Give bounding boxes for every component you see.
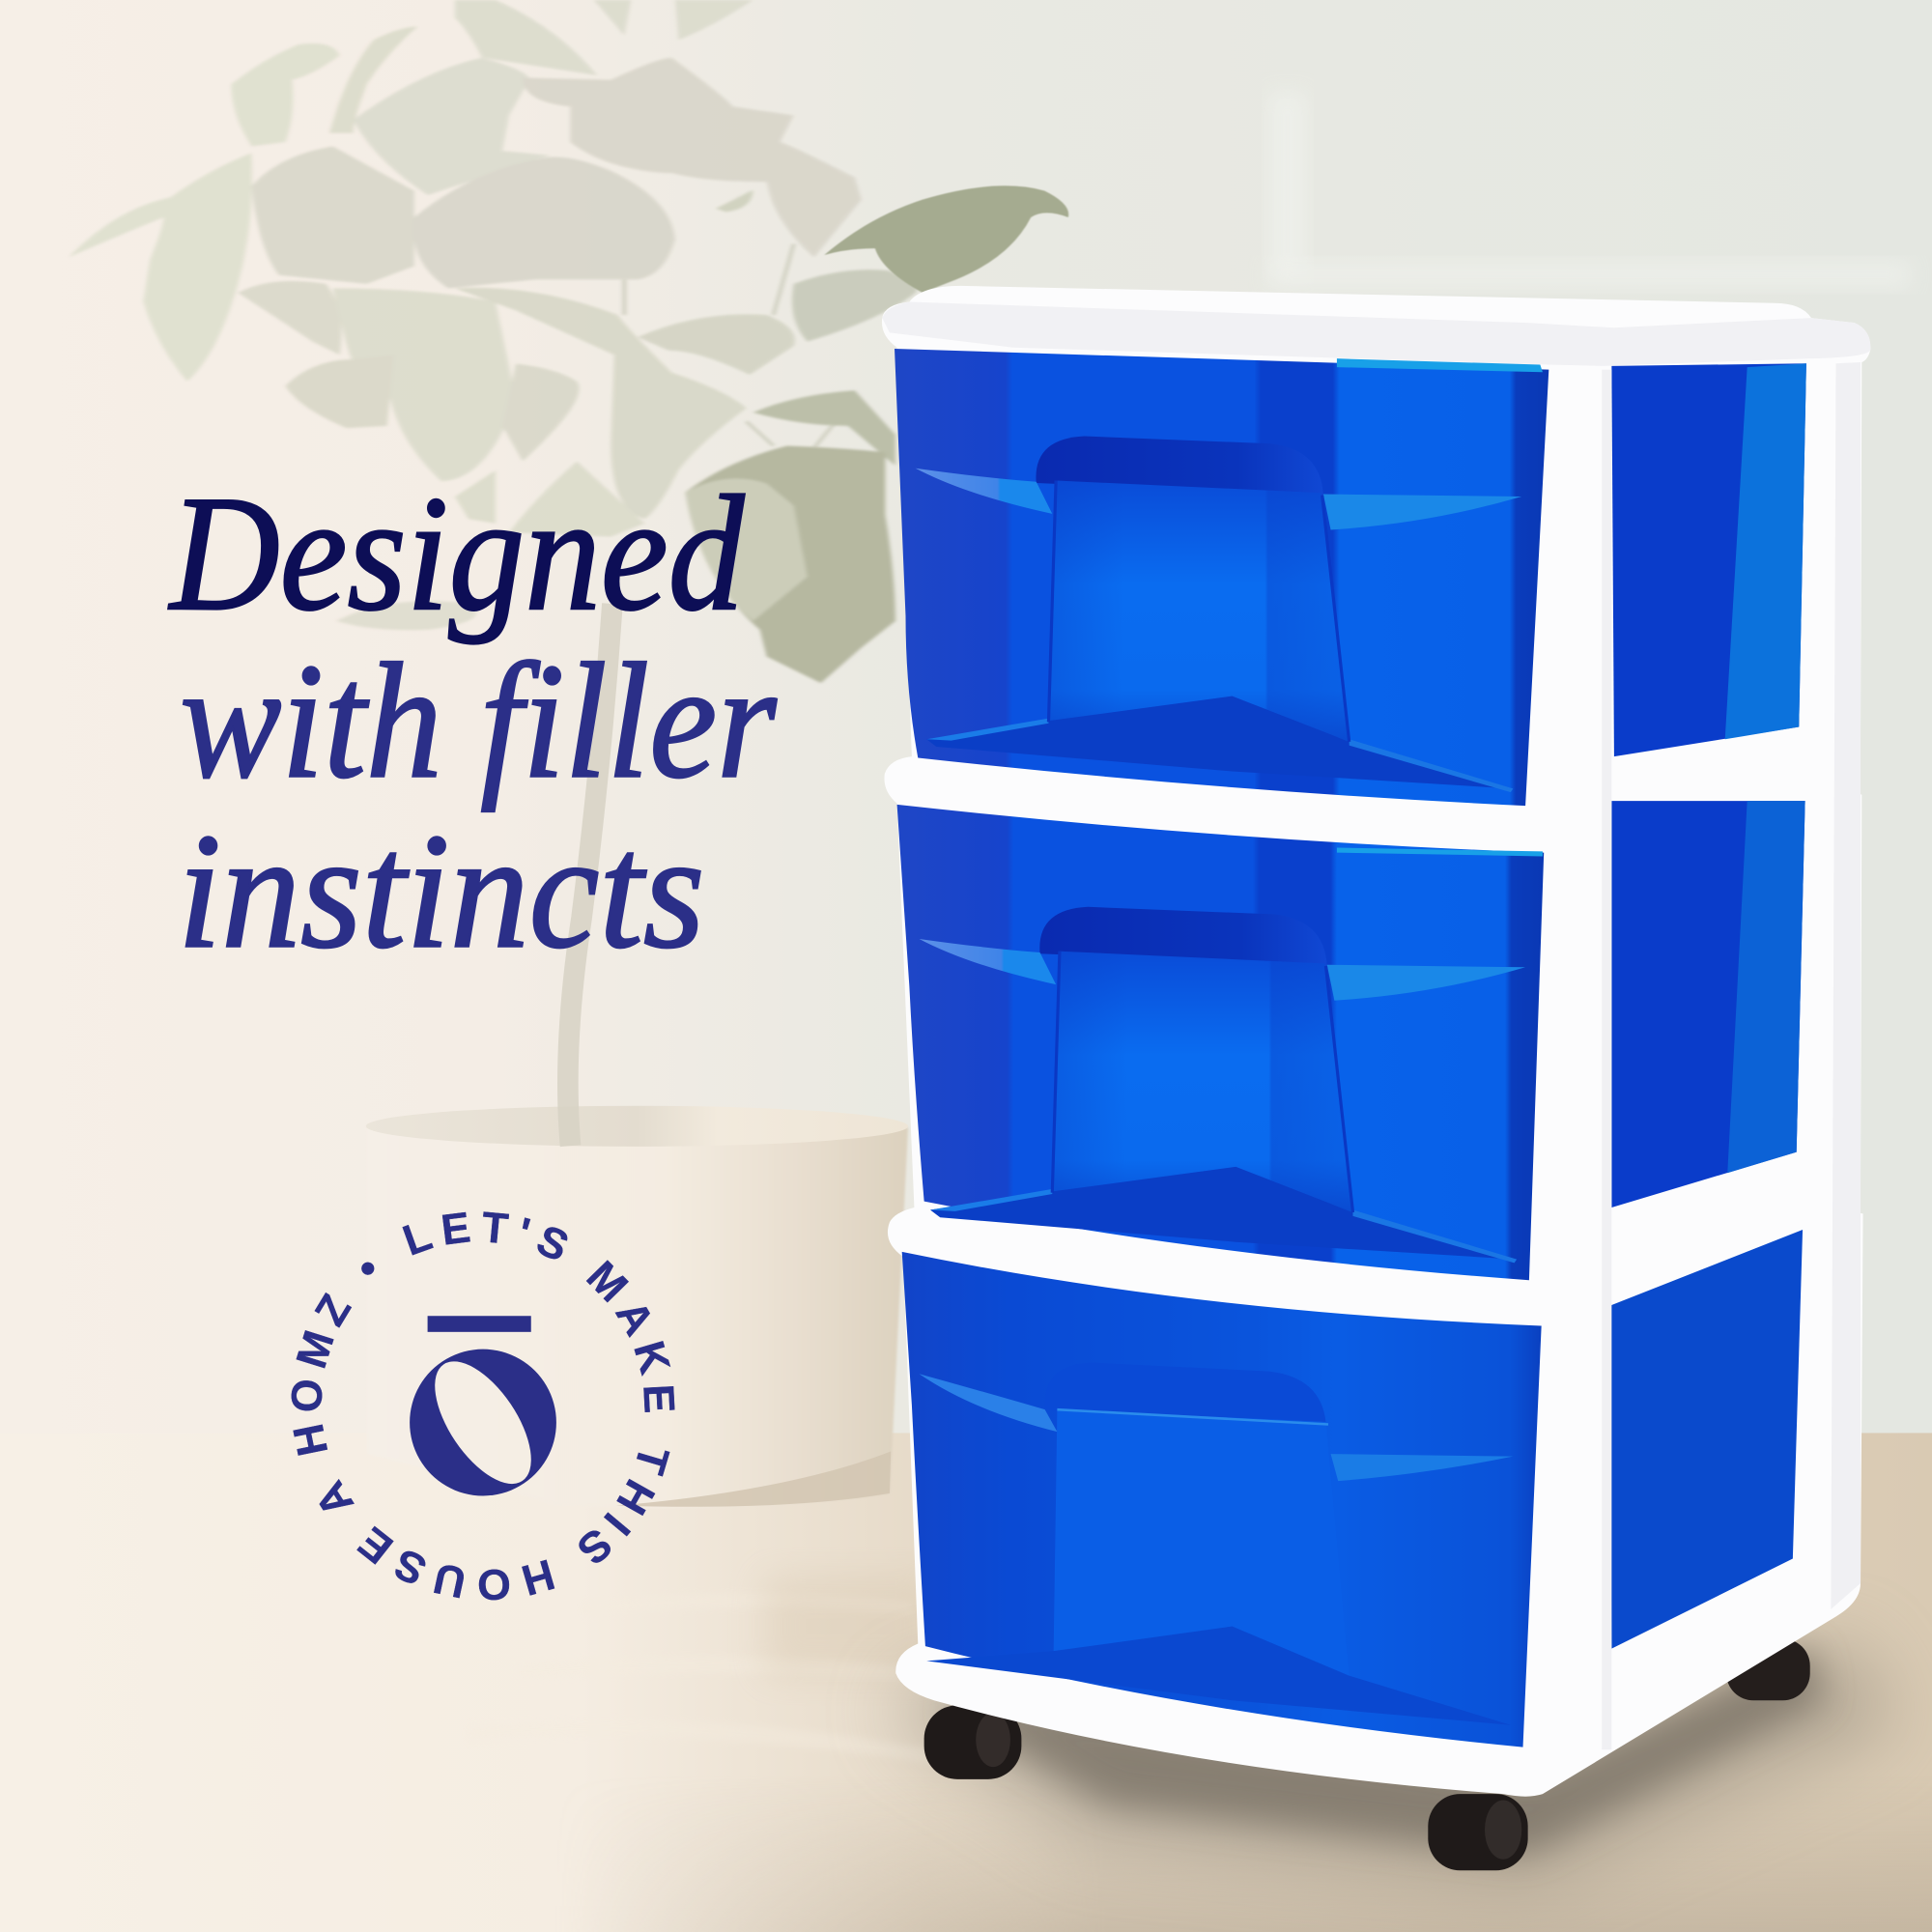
drawer 1: [895, 349, 1548, 806]
heading: [168, 462, 778, 982]
storage cart: [882, 286, 1870, 1870]
logo bar: [428, 1316, 531, 1332]
stem: [568, 604, 612, 1146]
drawer 2: [897, 805, 1544, 1280]
circular slogan: LET'S MAKE THIS HOUSE A HOMZ •: [292, 1211, 674, 1600]
background: wall and floor: [580, 0, 1932, 1932]
floor shadow: [887, 1638, 1897, 1886]
leaves: [69, 0, 917, 630]
top lid shading: [882, 301, 1870, 366]
wheel: front right: [1428, 1794, 1528, 1870]
heading line 2: with filler: [180, 630, 778, 812]
badge logo: [292, 1211, 674, 1600]
wheels: [924, 1638, 1810, 1870]
side panel 2: [1611, 801, 1805, 1208]
post shading: [1831, 362, 1861, 1609]
wheel: front left: [924, 1705, 1021, 1779]
drawer 3: [902, 1252, 1542, 1747]
white frame: [882, 286, 1870, 1797]
logo letter o: [410, 1350, 556, 1495]
heading line 3: instincts: [178, 800, 705, 982]
heading line 1: Designed: [168, 462, 745, 644]
leaf: lower right: [685, 390, 895, 683]
potted plant: [69, 0, 1068, 1508]
side panel 1: [1611, 363, 1806, 756]
pot: [366, 1106, 908, 1508]
side panel 3: [1609, 1230, 1803, 1649]
wheel: rear: [1726, 1638, 1810, 1700]
leaf: upper right: [824, 185, 1068, 293]
